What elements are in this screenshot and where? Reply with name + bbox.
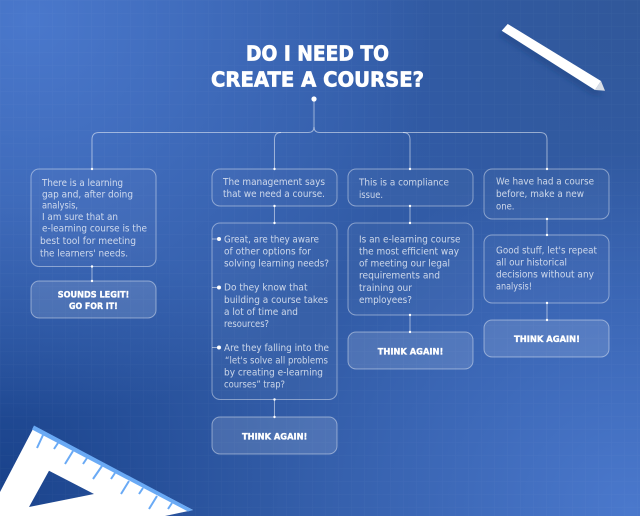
button: think again: THINK AGAIN! [242, 431, 307, 442]
panel: learning gap statement: There is a learning [41, 178, 123, 189]
panel: learning gap statement: I am sure that an [42, 212, 118, 223]
panel: learning gap statement: gap and, after doing [42, 189, 133, 200]
icon: set square ruler [0, 426, 193, 516]
column 2: management request [212, 169, 337, 454]
connector: questions to verdict [273, 398, 276, 418]
panel: learning gap statement: analysis, [42, 201, 78, 212]
title: CREATE A COURSE? [211, 68, 424, 92]
connector: statement to verdict [91, 265, 93, 282]
button: think again [212, 417, 337, 454]
column 3: compliance issue [348, 169, 473, 369]
panel: questions list: of other options for [224, 246, 312, 257]
title [211, 42, 424, 92]
panel: compliance question: employees? [359, 295, 412, 306]
panel: questions list: courses” trap? [224, 379, 285, 390]
connector tree from title to columns [91, 96, 548, 170]
panel: historical decisions response: all our historical [496, 257, 567, 268]
connector: previous course statement to response [546, 218, 548, 236]
panel: compliance question: Is an e-learning course [359, 234, 460, 245]
panel: compliance question: requirements and [359, 270, 440, 281]
panel: compliance question: the most efficient way [359, 246, 459, 257]
panel: compliance statement [348, 169, 473, 206]
panel: learning gap statement [31, 169, 156, 266]
button: think again: THINK AGAIN! [514, 334, 580, 345]
panel: compliance question: of meeting our legal [359, 258, 450, 269]
panel: historical decisions response: Good stuff, let's repeat [496, 245, 597, 256]
panel: questions list: resources? [224, 319, 269, 330]
panel: previous course statement: one. [496, 201, 514, 212]
button: think again [484, 320, 609, 357]
button: sounds legit: GO FOR IT! [69, 301, 118, 312]
panel: management statement: that we need a course. [223, 189, 325, 200]
panel: questions list [212, 223, 337, 400]
panel: compliance statement: issue. [359, 190, 383, 201]
panel: questions list: “let's solve all problems [225, 355, 328, 366]
panel: compliance question: training our [359, 283, 413, 294]
panel: questions list: Great, are they aware [224, 234, 319, 245]
connector: response to verdict [546, 302, 548, 321]
column 1: learning gap [31, 169, 156, 318]
panel: questions list: Do they know that [224, 283, 308, 294]
button: think again [348, 332, 473, 369]
panel: compliance question [348, 223, 473, 315]
button: sounds legit: SOUNDS LEGIT! [58, 289, 129, 300]
panel: historical decisions response: decisions without any [496, 269, 594, 280]
connector: compliance statement to question [409, 205, 411, 224]
panel: historical decisions response [484, 235, 609, 303]
panel: historical decisions response: analysis! [496, 281, 532, 292]
title: DO I NEED TO [246, 42, 389, 66]
panel: previous course statement: before, make a new [496, 189, 584, 200]
panel: previous course statement: We have had a course [496, 176, 594, 187]
column 4: previous course [484, 169, 609, 357]
panel: management statement [212, 169, 337, 206]
connector: management statement to questions [273, 205, 276, 224]
panel: management statement: The management says [222, 177, 325, 188]
panel: questions list: a lot of time and [224, 307, 298, 318]
panel: learning gap statement: best tool for meeting [40, 236, 136, 247]
panel: previous course statement [484, 169, 609, 219]
panel: questions list: by creating e-learning [224, 367, 323, 378]
panel: learning gap statement: e-learning course is the [42, 223, 147, 234]
panel: questions list: building a course takes [224, 295, 328, 306]
panel: questions list: solving learning needs? [224, 258, 329, 269]
button: think again: THINK AGAIN! [378, 346, 443, 357]
panel: compliance statement: This is a compliance [358, 177, 449, 188]
panel: learning gap statement: the learners' needs. [40, 249, 128, 260]
button: sounds legit [31, 281, 156, 318]
panel: questions list: Are they falling into the [224, 343, 329, 354]
icon: pencil [499, 24, 605, 96]
connector: compliance question to verdict [409, 314, 411, 333]
